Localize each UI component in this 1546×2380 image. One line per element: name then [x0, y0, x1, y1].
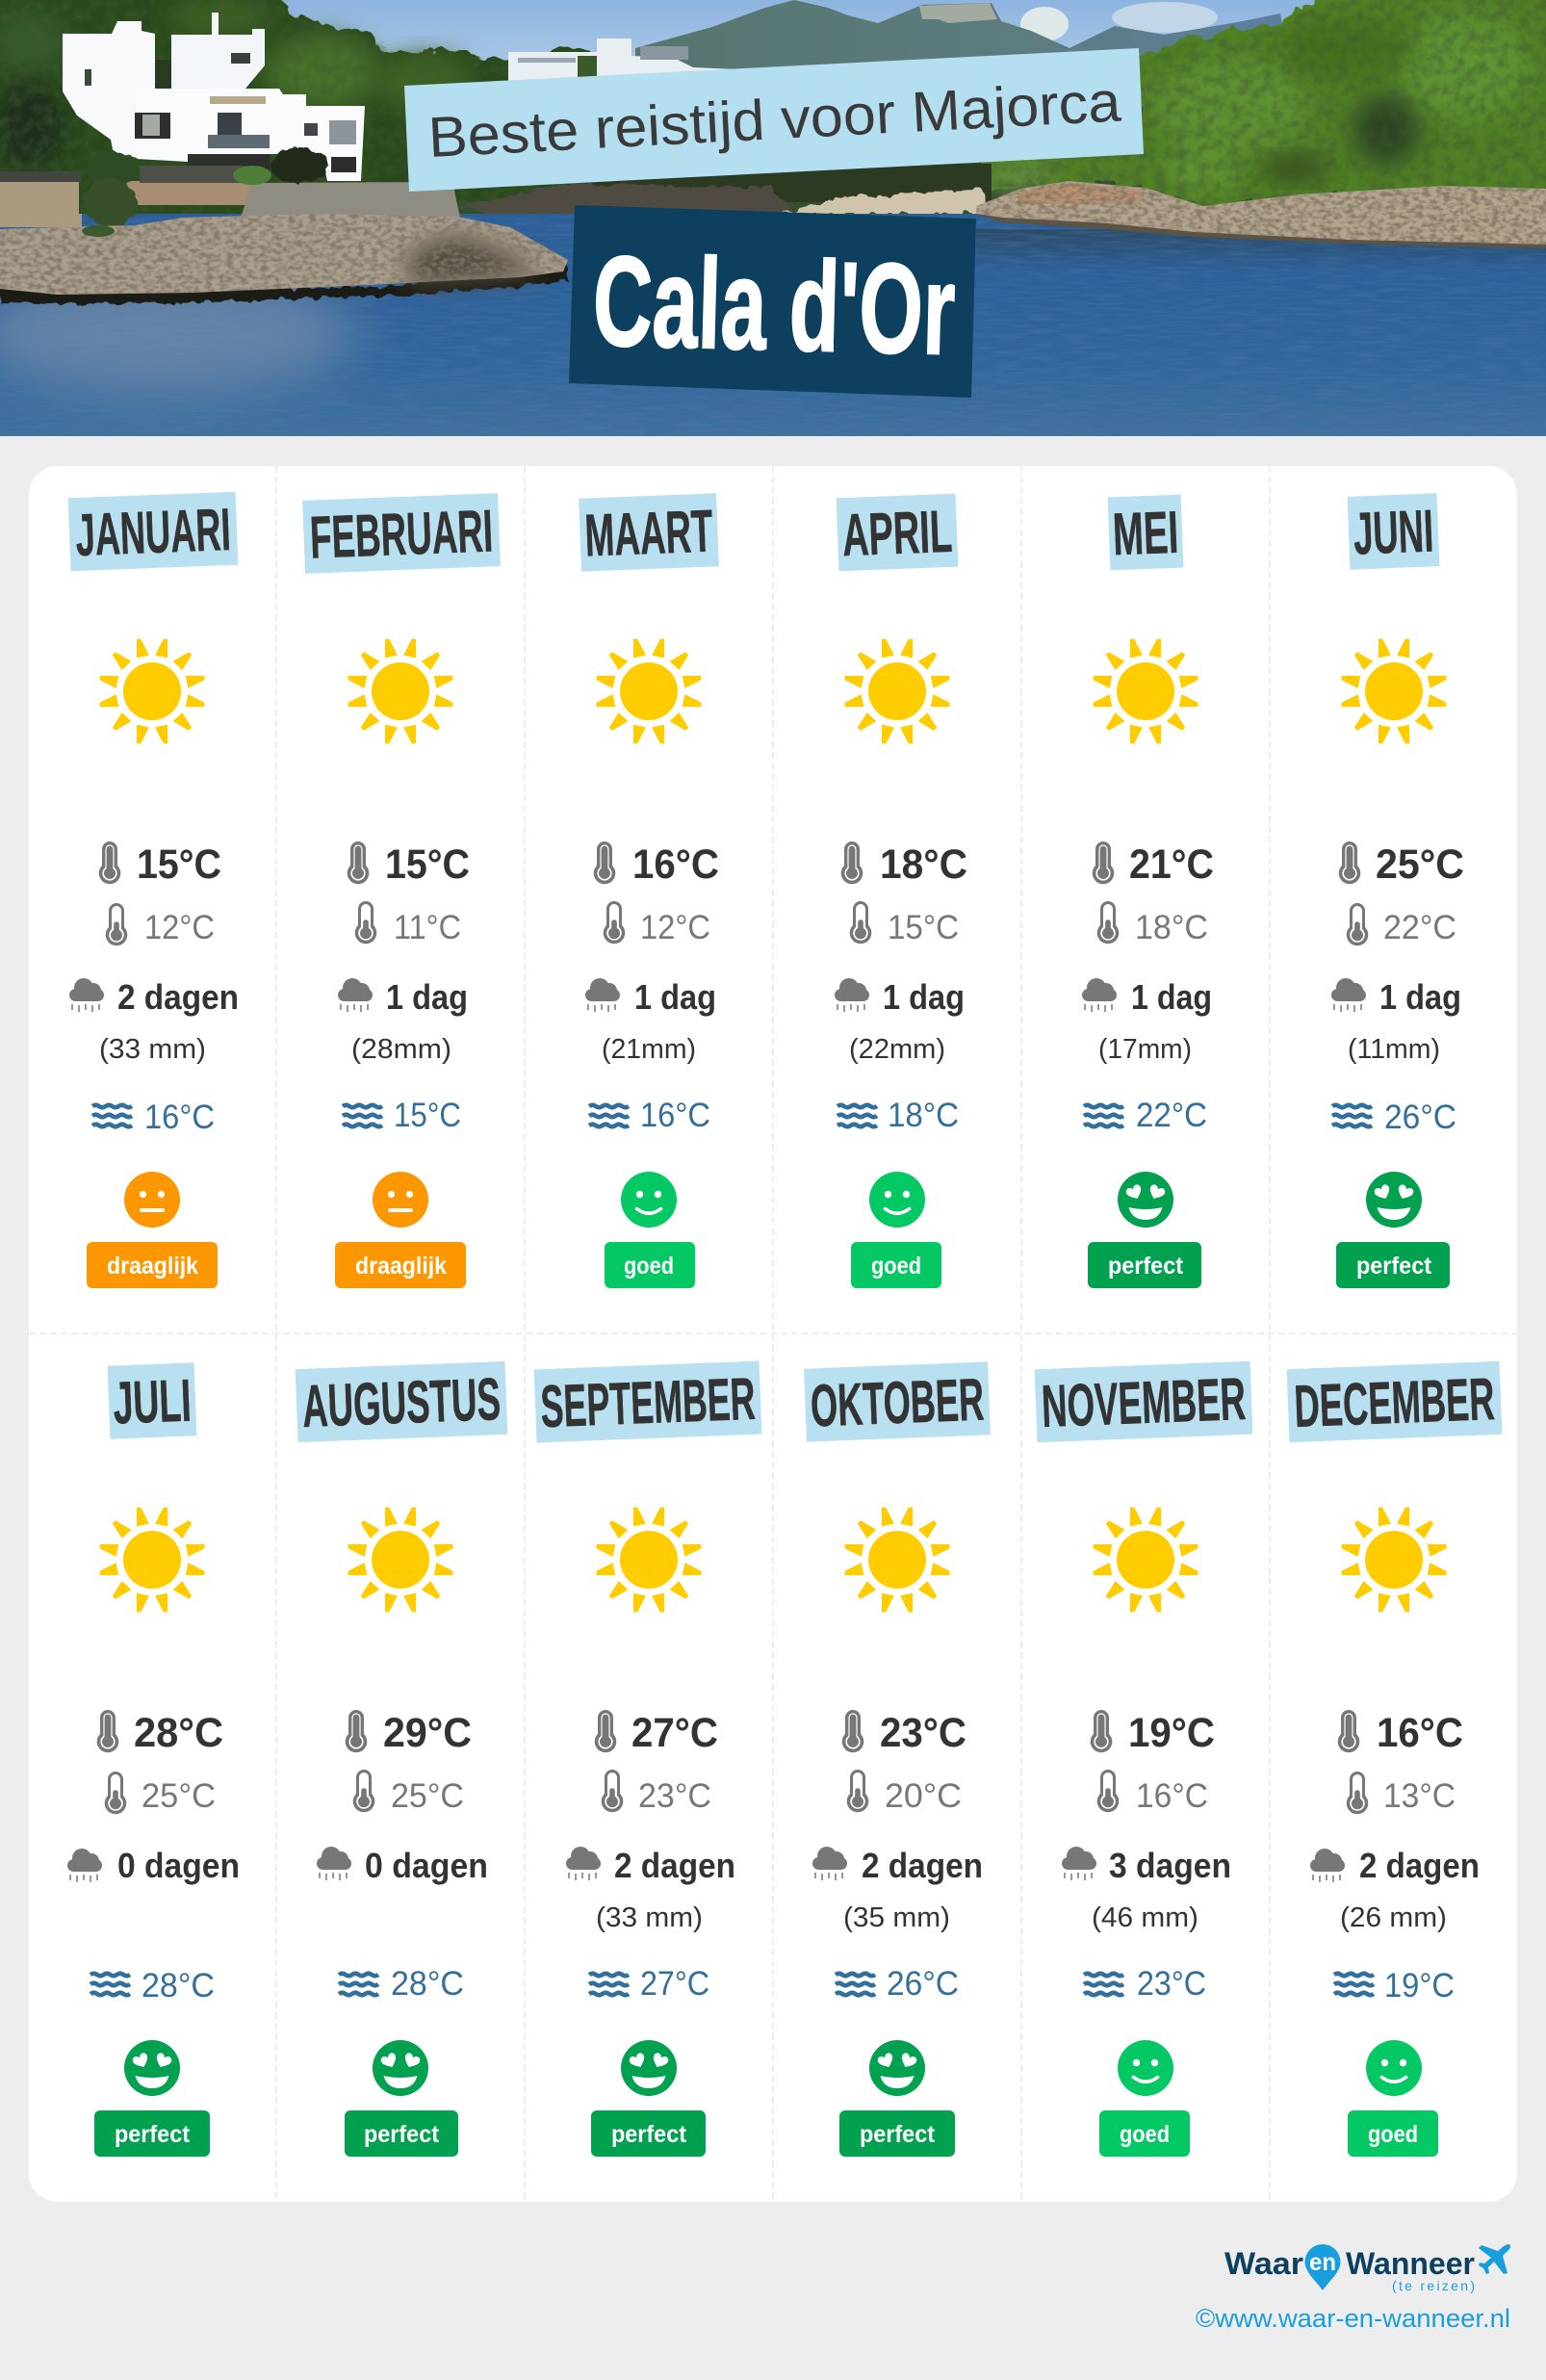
rating badge — [1348, 2110, 1438, 2157]
icon: thermometer high — [348, 841, 369, 884]
rainfall: (46 mm) — [1092, 1902, 1198, 1933]
rainfall: (17mm) — [1098, 1034, 1192, 1065]
rating badge: draaglijk — [107, 1253, 198, 1280]
month label: JANUARI — [74, 497, 232, 569]
icon: waves — [343, 1105, 382, 1126]
rain days: 0 dagen — [365, 1846, 488, 1885]
max temperature: 19°C — [1128, 1710, 1215, 1756]
icon: waves — [837, 1105, 877, 1126]
icon: rain cloud — [812, 1847, 847, 1880]
month label — [68, 492, 238, 571]
icon: rain cloud — [585, 978, 620, 1012]
rainfall: (28mm) — [351, 1034, 451, 1065]
rainfall: (26 mm) — [1340, 1902, 1447, 1933]
sea temperature: 16°C — [144, 1099, 215, 1136]
title banner — [569, 205, 976, 398]
rating badge — [1088, 1242, 1201, 1288]
sea temperature: 26°C — [1384, 1099, 1456, 1136]
hero photo: harbour of Cala d'Or — [0, 0, 1546, 436]
rainfall: (33 mm) — [596, 1902, 703, 1933]
icon: thermometer high — [595, 1710, 616, 1752]
rainfall: (21mm) — [602, 1034, 696, 1065]
month label — [1035, 1361, 1252, 1442]
icon: waves — [589, 1974, 629, 1995]
min temperature: 11°C — [394, 909, 461, 946]
panel: mei — [1082, 495, 1214, 1288]
panel: februari — [302, 493, 501, 1288]
icon: thermometer high — [1339, 841, 1360, 884]
month label — [302, 493, 501, 574]
icon: good face — [1366, 2040, 1422, 2096]
max temperature: 16°C — [632, 841, 719, 888]
icon: rain cloud — [67, 1849, 102, 1882]
icon: neutral face — [124, 1172, 180, 1228]
rainfall: (33 mm) — [99, 1034, 206, 1065]
left trees — [0, 0, 591, 214]
min temperature: 13°C — [1383, 1777, 1456, 1815]
sea temperature: 15°C — [394, 1097, 461, 1134]
panel: september — [534, 1361, 761, 2157]
icon: sun — [1342, 1508, 1446, 1612]
icon: thermometer high — [99, 841, 120, 884]
month label: SEPTEMBER — [539, 1366, 757, 1440]
max temperature: 18°C — [880, 841, 967, 888]
sea temperature: 19°C — [1384, 1967, 1455, 2005]
icon: thermometer high — [1091, 1710, 1112, 1752]
month label: APRIL — [841, 499, 953, 569]
icon: map pin — [1305, 2244, 1340, 2290]
rating badge: perfect — [364, 2121, 440, 2148]
month label — [804, 1361, 991, 1442]
icon: sun — [348, 1508, 452, 1612]
icon: thermometer high — [346, 1710, 367, 1752]
rain days: 1 dag — [883, 977, 965, 1017]
rainfall: (11mm) — [1348, 1034, 1440, 1065]
left wall and house — [0, 171, 81, 183]
rain days: 2 dagen — [862, 1846, 983, 1885]
min temperature: 25°C — [142, 1777, 216, 1815]
icon: thermometer low — [353, 1770, 374, 1812]
icon: thermometer low — [106, 903, 127, 945]
icon: good face — [621, 1172, 677, 1228]
icon: thermometer high — [841, 841, 863, 884]
icon: sun — [1094, 639, 1198, 743]
rain days: 1 dag — [386, 977, 468, 1017]
rain days: 1 dag — [1131, 977, 1212, 1017]
icon: thermometer low — [105, 1772, 126, 1814]
rating badge: perfect — [115, 2121, 191, 2148]
icon: sun — [597, 1508, 701, 1612]
max temperature: 15°C — [137, 841, 221, 888]
min temperature: 23°C — [638, 1777, 711, 1815]
panel: januari — [68, 492, 239, 1288]
icon: thermometer low — [850, 901, 871, 944]
min temperature: 15°C — [888, 909, 959, 946]
white house — [63, 21, 155, 159]
icon: sun — [1094, 1508, 1198, 1612]
icon: sun — [100, 639, 204, 743]
logo tagline: (te reizen) — [1392, 2278, 1475, 2293]
icon: good face — [1118, 2040, 1173, 2096]
leaf texture — [0, 0, 1546, 231]
icon: thermometer high — [842, 1710, 863, 1752]
month label: NOVEMBER — [1041, 1366, 1247, 1440]
sea temperature: 18°C — [888, 1097, 959, 1134]
icon: sun — [845, 639, 949, 743]
copyright url: ©www.waar-en-wanneer.nl — [1196, 2304, 1510, 2333]
rating badge: goed — [1120, 2121, 1170, 2148]
icon: thermometer high — [594, 841, 615, 884]
rating badge — [839, 2110, 955, 2157]
icon: thermometer high — [97, 1710, 118, 1752]
icon: rain cloud — [566, 1847, 601, 1880]
icon: thermometer low — [1347, 1772, 1368, 1814]
rating badge — [345, 2110, 458, 2157]
icon: perfect face — [373, 2040, 428, 2096]
icon: perfect face — [1366, 1172, 1422, 1228]
icon: good face — [869, 1172, 925, 1228]
water — [0, 214, 1546, 436]
panel: augustus — [296, 1361, 507, 2157]
icon: waves — [1084, 1974, 1123, 1995]
icon: rain cloud — [1310, 1849, 1345, 1882]
panel: april — [835, 494, 967, 1288]
rating badge — [851, 1242, 941, 1288]
sea temperature: 28°C — [142, 1967, 215, 2005]
icon: waves — [836, 1974, 875, 1995]
icon: sun — [348, 639, 452, 743]
logo word: Waar: Waar — [1224, 2246, 1303, 2281]
icon: thermometer low — [602, 1770, 623, 1812]
icon: perfect face — [124, 2040, 180, 2096]
max temperature: 15°C — [385, 841, 470, 888]
left rock — [0, 266, 568, 304]
rating badge: goed — [871, 1253, 921, 1280]
max temperature: 28°C — [134, 1710, 223, 1756]
icon: waves — [589, 1105, 629, 1126]
icon: sun — [597, 639, 701, 743]
max temperature: 23°C — [880, 1710, 966, 1756]
rating badge — [94, 2110, 210, 2157]
sea temperature: 23°C — [1137, 1965, 1206, 2003]
panel: maart — [579, 493, 719, 1288]
panel: december — [1287, 1361, 1502, 2157]
icon: waves — [1334, 1974, 1374, 1995]
shrubs — [85, 152, 142, 185]
rating badge — [335, 1242, 466, 1288]
icon: sun — [845, 1508, 949, 1612]
icon: thermometer high — [1338, 1710, 1359, 1752]
logo word: Wanneer: Wanneer — [1346, 2246, 1475, 2281]
rating badge: draaglijk — [355, 1253, 447, 1280]
icon: perfect face — [869, 2040, 925, 2096]
month label — [108, 1362, 196, 1439]
right rocks — [976, 181, 1546, 245]
max temperature: 27°C — [631, 1710, 718, 1756]
icon: thermometer low — [1347, 903, 1368, 945]
subtitle banner — [404, 48, 1144, 192]
subtitle text: Beste reistijd voor Majorca — [426, 69, 1122, 169]
panel: oktober — [804, 1361, 991, 2157]
sea temperature: 22°C — [1136, 1097, 1207, 1134]
icon: airplane — [1479, 2244, 1510, 2274]
month label — [837, 494, 958, 571]
month label — [1348, 493, 1439, 570]
icon: thermometer low — [604, 901, 625, 944]
icon: rain cloud — [338, 978, 373, 1012]
icon: rain cloud — [69, 978, 104, 1012]
rating badge: perfect — [1356, 1253, 1432, 1280]
rainfall: (22mm) — [849, 1034, 945, 1065]
min temperature: 20°C — [885, 1777, 962, 1815]
month label: JUNI — [1353, 498, 1434, 568]
rating badge: goed — [624, 1253, 674, 1280]
panel: juni — [1331, 493, 1464, 1288]
panel: months card — [29, 466, 1517, 2202]
icon: perfect face — [621, 2040, 677, 2096]
icon: sun — [100, 1508, 204, 1612]
month label: FEBRUARI — [309, 498, 494, 572]
rating badge: perfect — [1108, 1253, 1184, 1280]
sea temperature: 27°C — [640, 1965, 709, 2003]
rating badge — [1099, 2110, 1190, 2157]
icon: thermometer high — [1093, 841, 1114, 884]
rain days: 2 dagen — [117, 977, 239, 1017]
rating badge — [605, 1242, 695, 1288]
month label — [534, 1361, 761, 1442]
icon: sun — [1342, 639, 1446, 743]
month label — [1108, 495, 1183, 570]
rating badge: perfect — [860, 2121, 936, 2148]
max temperature: 25°C — [1376, 841, 1464, 888]
sea temperature: 26°C — [887, 1965, 959, 2003]
max temperature: 29°C — [383, 1710, 472, 1756]
icon: perfect face — [1118, 1172, 1173, 1228]
logo word: en: en — [1309, 2249, 1336, 2276]
right trees — [982, 0, 1546, 210]
title text: Cala d'Or — [591, 230, 957, 382]
month label: MEI — [1112, 500, 1179, 568]
rating badge — [1336, 1242, 1450, 1288]
month label — [579, 493, 719, 572]
rain days: 2 dagen — [614, 1846, 735, 1885]
icon: rain cloud — [1082, 978, 1117, 1012]
rating badge: perfect — [611, 2121, 687, 2148]
icon: waves — [1084, 1105, 1123, 1126]
icon: waves — [1332, 1105, 1372, 1126]
icon: neutral face — [373, 1172, 428, 1228]
min temperature: 22°C — [1383, 909, 1456, 946]
max temperature: 16°C — [1377, 1710, 1463, 1756]
icon: thermometer low — [847, 1770, 868, 1812]
icon: rain cloud — [1062, 1847, 1096, 1880]
month label — [296, 1361, 507, 1442]
min temperature: 18°C — [1135, 909, 1208, 946]
footer logo — [1224, 2244, 1510, 2293]
mid shadow and beach — [568, 164, 992, 202]
panel: juli — [67, 1362, 240, 2157]
icon: thermometer low — [1097, 1770, 1119, 1812]
panel: november — [1035, 1361, 1252, 2157]
month label: OKTOBER — [810, 1367, 985, 1439]
icon: waves — [339, 1974, 378, 1995]
min temperature: 12°C — [640, 909, 710, 946]
min temperature: 12°C — [144, 909, 215, 946]
month label: JULI — [112, 1367, 193, 1437]
icon: rain cloud — [835, 978, 869, 1012]
min temperature: 25°C — [391, 1777, 464, 1815]
rain days: 1 dag — [1379, 977, 1461, 1017]
icon: rain cloud — [1331, 978, 1366, 1012]
month label: MAART — [583, 498, 714, 570]
rating badge — [87, 1242, 218, 1288]
mid hotel — [508, 39, 734, 81]
rating badge — [591, 2110, 706, 2157]
month label: AUGUSTUS — [301, 1366, 502, 1440]
sea temperature: 16°C — [640, 1097, 710, 1134]
min temperature: 16°C — [1136, 1777, 1208, 1815]
rainfall: (35 mm) — [843, 1902, 950, 1933]
icon: waves — [92, 1105, 132, 1126]
icon: rain cloud — [317, 1847, 351, 1880]
max temperature: 21°C — [1129, 841, 1214, 888]
icon: thermometer low — [1097, 901, 1119, 944]
rain days: 3 dagen — [1109, 1846, 1231, 1885]
sea temperature: 28°C — [391, 1965, 464, 2003]
rain days: 2 dagen — [1359, 1846, 1480, 1885]
rating badge: goed — [1368, 2121, 1418, 2148]
icon: thermometer low — [355, 901, 376, 944]
rain days: 1 dag — [634, 977, 716, 1017]
rain days: 0 dagen — [117, 1846, 240, 1885]
icon: waves — [90, 1974, 130, 1995]
